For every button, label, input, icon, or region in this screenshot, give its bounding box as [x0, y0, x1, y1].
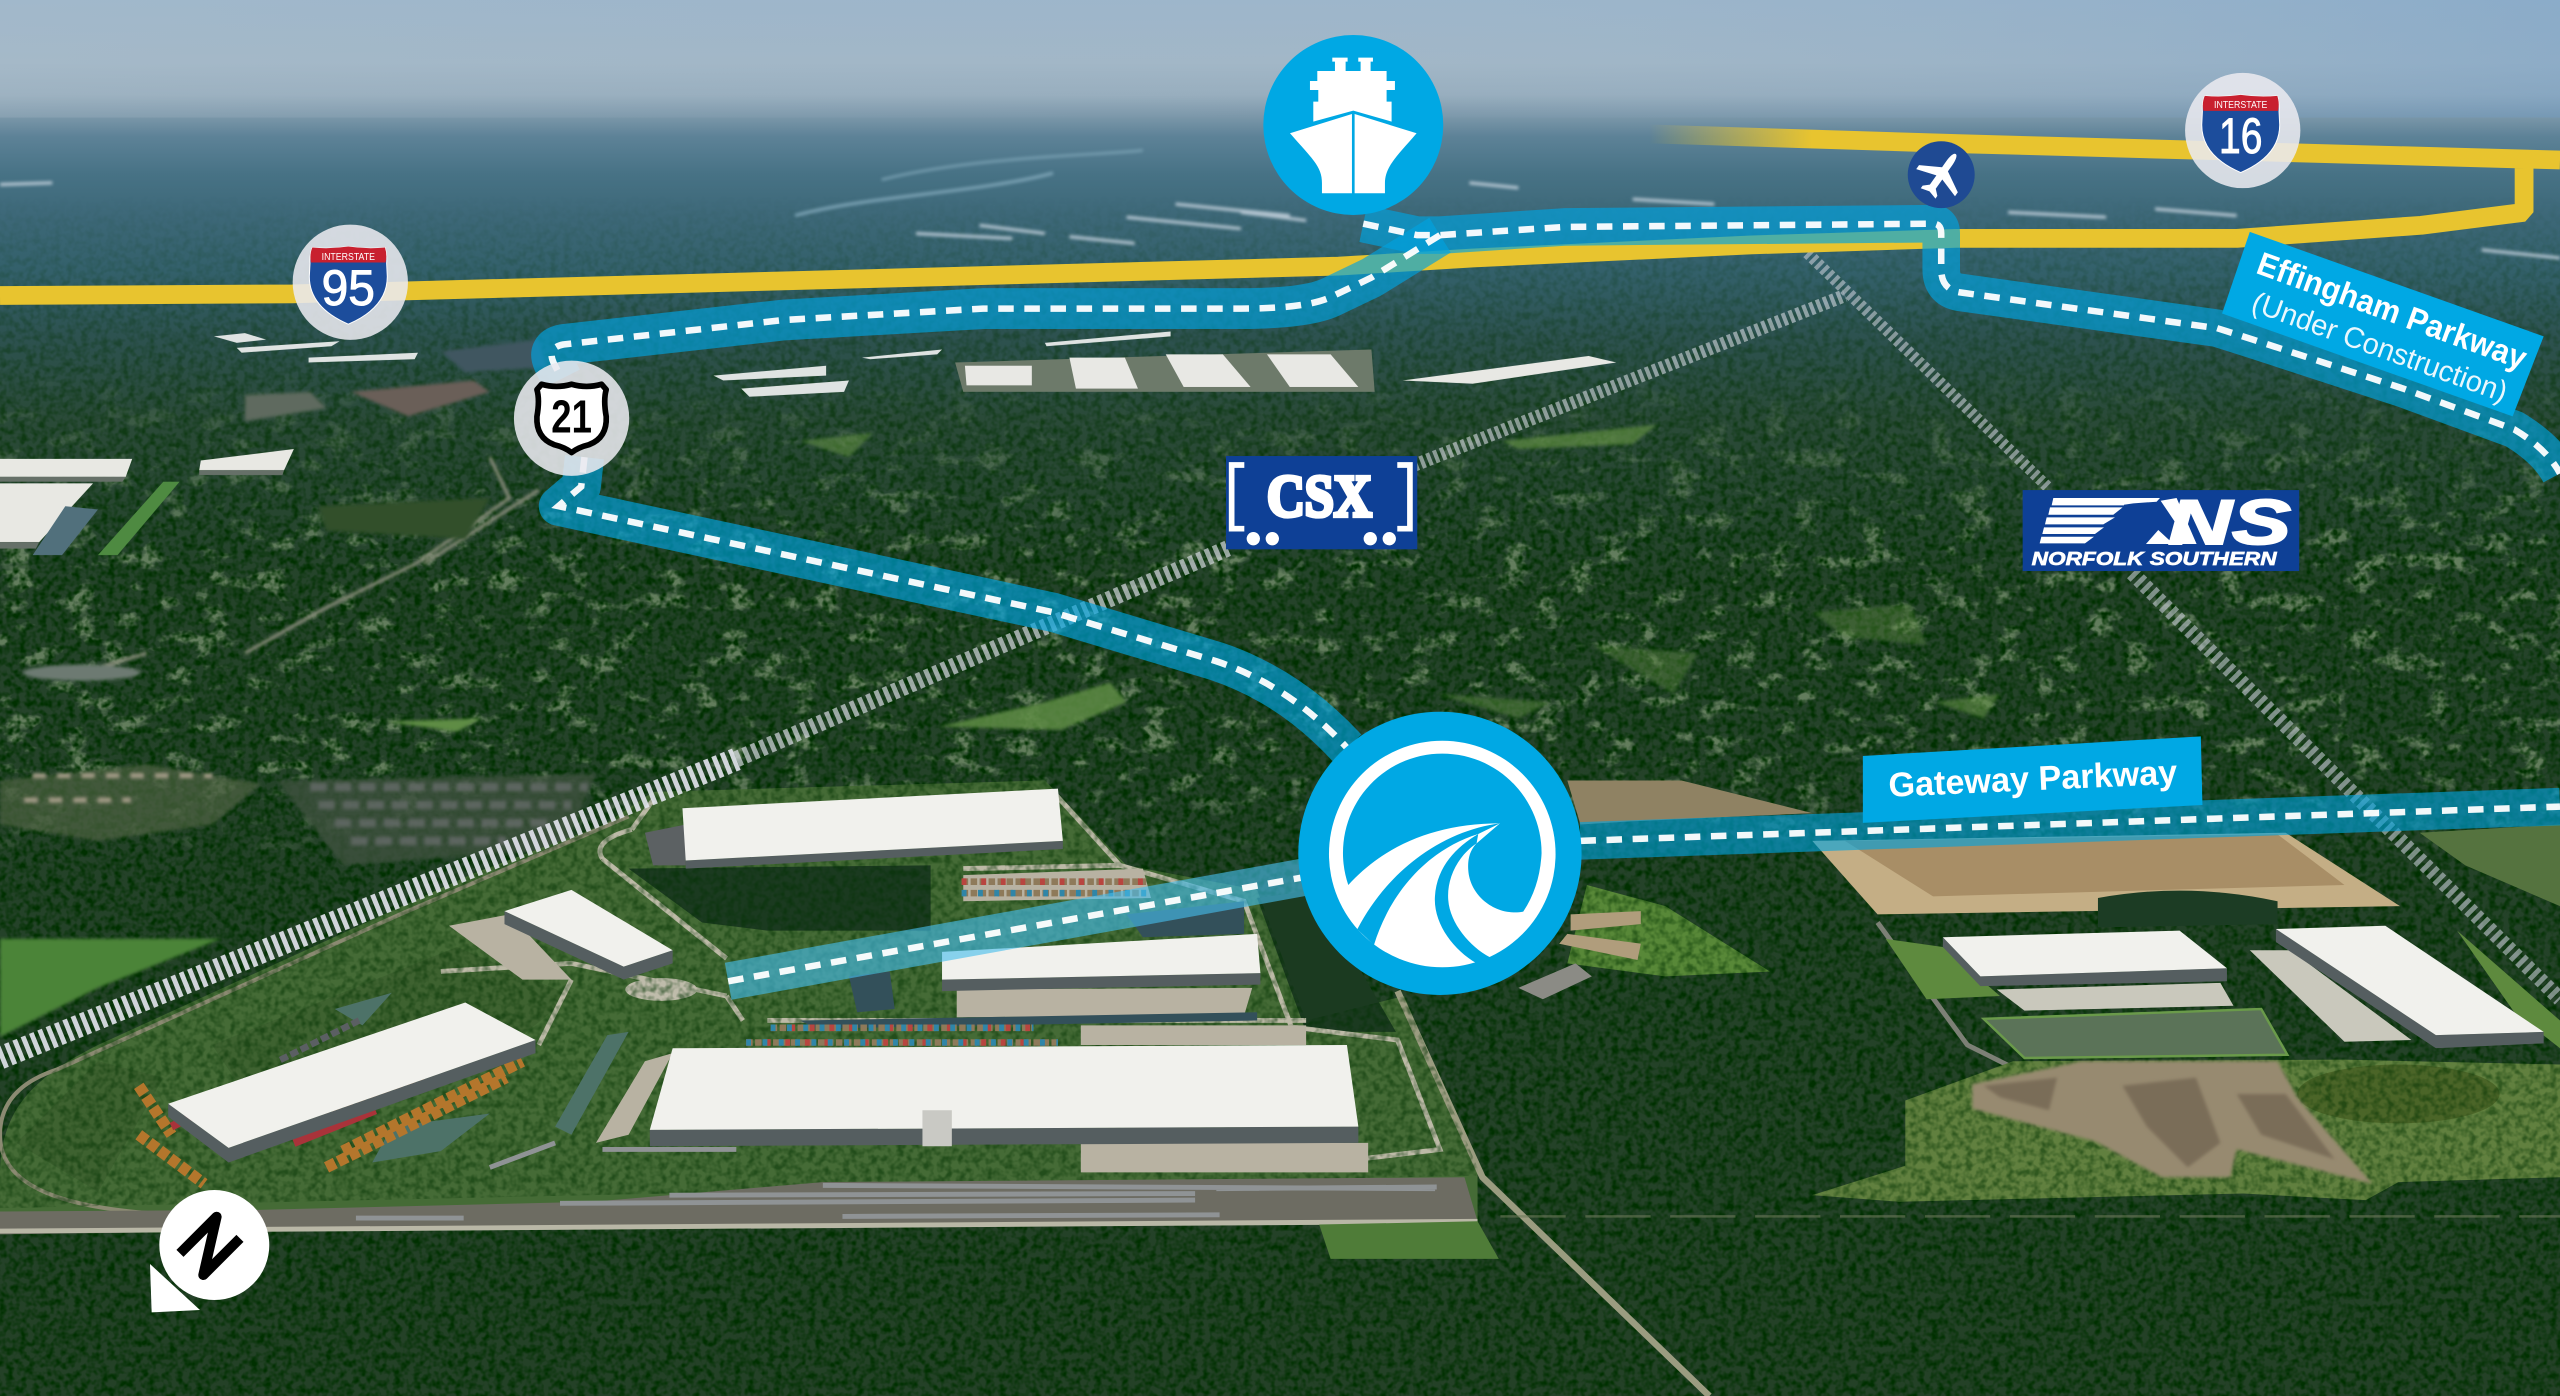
route band US 21 to site [558, 457, 1347, 748]
CSX rail line [0, 296, 1845, 1058]
icon: Interstate 16 shield: INTERSTATE [2214, 100, 2268, 111]
Norfolk Southern logo: NORFOLK SOUTHERN [2032, 548, 2277, 569]
dashed road centre lines [552, 224, 2560, 981]
ground texture [0, 780, 2560, 1208]
pavement, ponds and dirt [0, 780, 2411, 1259]
icon: airport plane [1908, 140, 1975, 208]
icon: Interstate 95 shield: 95 [322, 260, 375, 316]
Effingham Parkway route band [1363, 224, 2560, 473]
icon: US Route 21 shield [514, 361, 629, 476]
distant warehouses [0, 331, 1616, 555]
icon: US Route 21 shield: 21 [551, 391, 592, 443]
icon: Interstate 16 shield: 16 [2219, 108, 2262, 164]
site logo: wave in circle [1298, 712, 1582, 995]
icon: Interstate 95 shield [293, 225, 408, 340]
warehouse buildings [168, 789, 2544, 1163]
label: Gateway Parkway [1863, 736, 2202, 823]
icon: Interstate 95 shield: INTERSTATE [322, 252, 375, 263]
CSX logo: CSX [1267, 463, 1372, 529]
label: Effingham Parkway: (Under Construction) [2247, 286, 2512, 409]
Gateway Parkway west band [728, 877, 1306, 981]
east development site [1500, 825, 2560, 1216]
Norfolk Southern logo [2023, 488, 2299, 571]
label: Effingham Parkway: Effingham Parkway [2252, 244, 2532, 376]
Norfolk Southern rail line [1807, 253, 2560, 999]
Norfolk Southern logo: NS [2168, 488, 2291, 558]
north arrow [150, 1190, 269, 1312]
industrial site grounds [0, 780, 1709, 1396]
CSX logo [1226, 456, 1417, 549]
label: Effingham Parkway [2222, 232, 2544, 416]
label: Gateway Parkway: Gateway Parkway [1888, 754, 2178, 805]
icon: port ship [1263, 35, 1443, 215]
route band to US 21 [552, 235, 1440, 379]
icon: Interstate 16 shield [2185, 73, 2300, 188]
Gateway Parkway east band [1580, 807, 2560, 841]
green clearings [0, 425, 2000, 1037]
Interstate highway lines [0, 134, 2560, 296]
